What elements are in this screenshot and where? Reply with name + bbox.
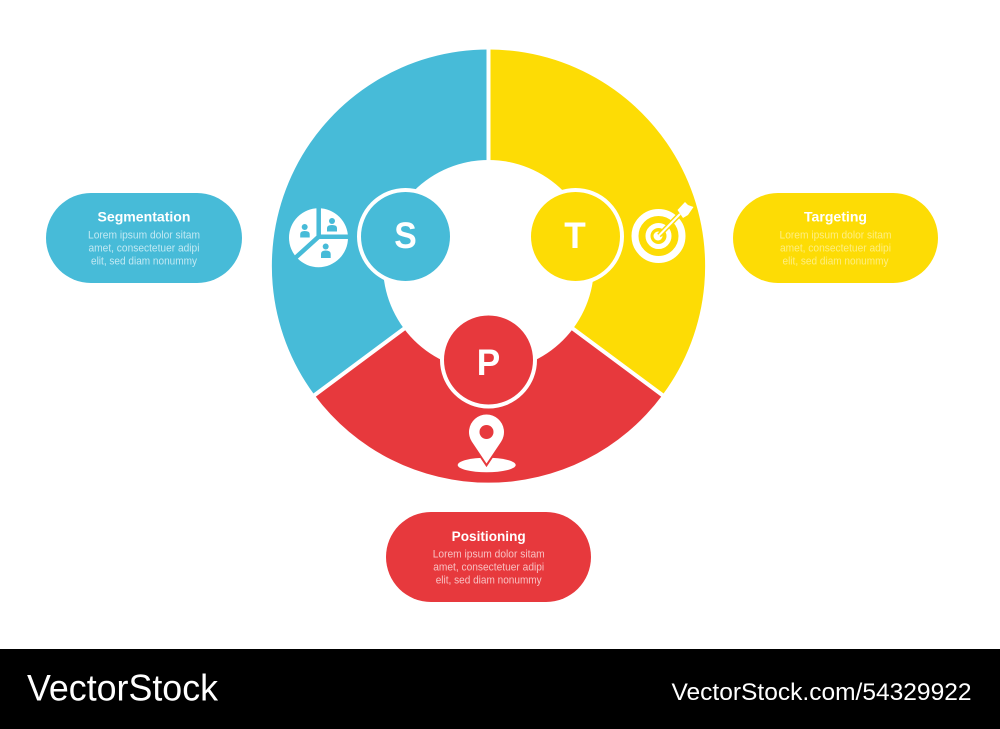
callout: positioning: [386, 512, 591, 602]
callout: positioning: Lorem ipsum dolor sitam: [433, 549, 545, 561]
footer bar: [0, 649, 1000, 729]
badge: S: [359, 190, 452, 283]
callout: targeting: amet, consectetuer adipi: [780, 242, 891, 254]
icon: pie chart with people: [289, 205, 351, 267]
callout: segmentation: elit, sed diam nonummy: [91, 256, 197, 268]
segment: positioning: [314, 266, 662, 483]
callout: targeting: elit, sed diam nonummy: [782, 256, 889, 268]
badge: T: T: [564, 215, 586, 256]
footer bar: VectorStock.com/54329922: [672, 679, 972, 706]
callout: targeting: Lorem ipsum dolor sitam: [780, 230, 892, 242]
donut chart: segmentation, targeting, positioning: [272, 47, 705, 483]
segment: targeting: [488, 49, 705, 395]
callout: targeting: Targeting: [804, 210, 867, 224]
callout: positioning: elit, sed diam nonummy: [436, 575, 542, 587]
callout: segmentation: Lorem ipsum dolor sitam: [88, 230, 200, 242]
badge: T: [529, 190, 622, 283]
footer bar: VectorStock: [27, 668, 218, 708]
callout: positioning: Positioning: [452, 529, 526, 544]
icon: location pin: [458, 415, 516, 472]
callout: segmentation: Segmentation: [98, 210, 190, 224]
badge: P: [442, 314, 535, 406]
callout: positioning: amet, consectetuer adipi: [433, 562, 544, 574]
badge: P: P: [477, 342, 500, 383]
callout: segmentation: amet, consectetuer adipi: [88, 242, 200, 254]
callout: targeting: [733, 193, 938, 283]
callout: segmentation: [46, 193, 242, 283]
icon: target with arrow: [635, 202, 694, 260]
badge: S: S: [394, 215, 417, 256]
segment: segmentation: [272, 49, 488, 395]
